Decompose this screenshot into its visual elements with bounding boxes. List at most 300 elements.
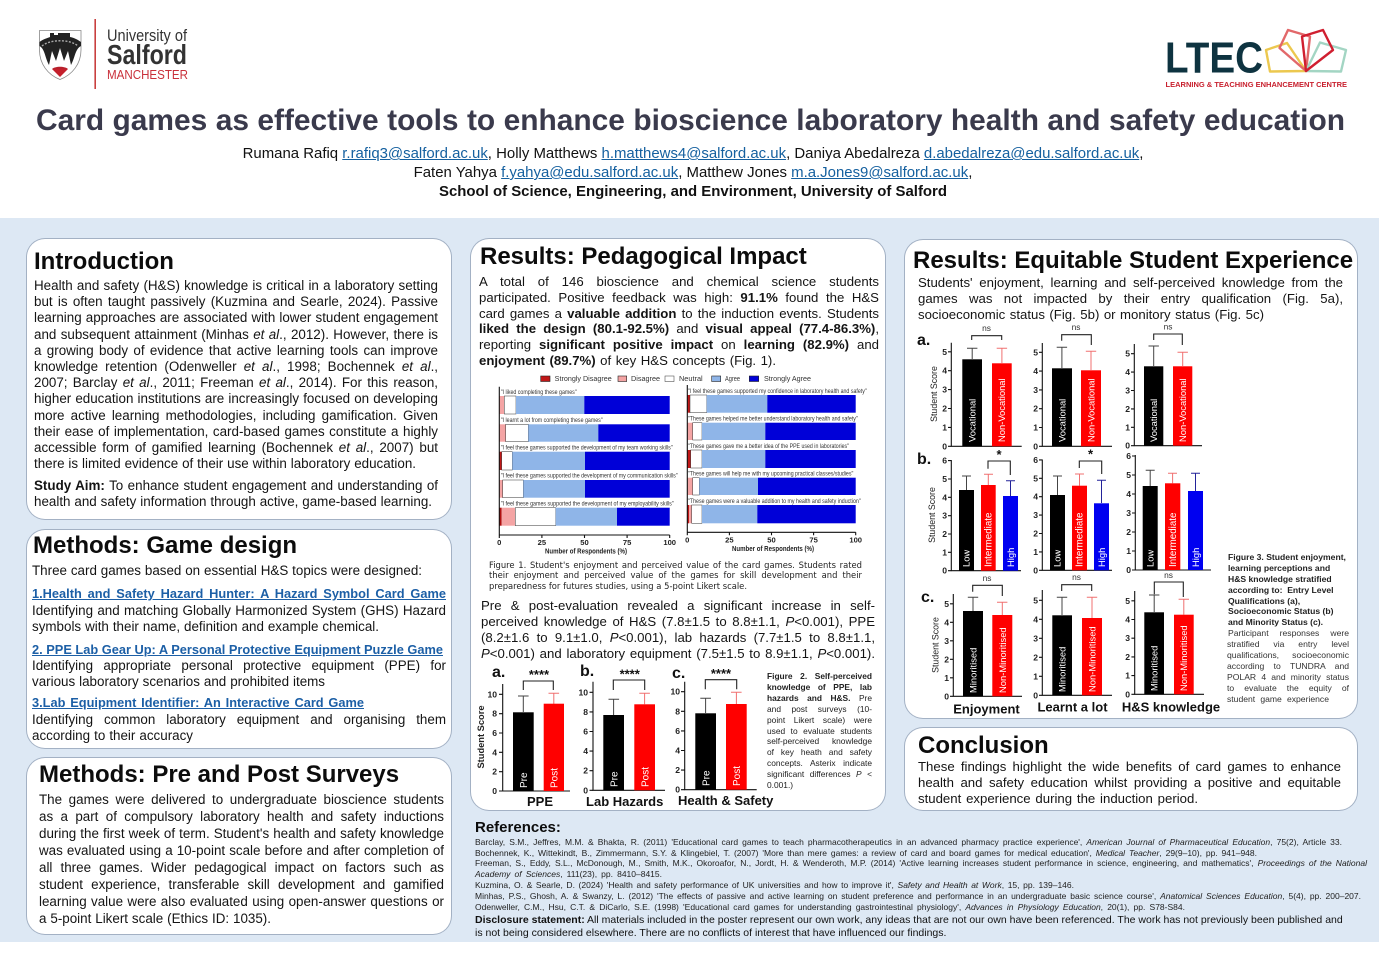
chart a PPE: 10: [487, 689, 497, 699]
chart a PPE: Pre: [519, 772, 530, 788]
right Likert chart: 25: [725, 536, 734, 544]
chart b3: 2: [1126, 527, 1131, 537]
chart c2: Minoritised: [1056, 647, 1068, 692]
chart a3: 3: [1125, 386, 1130, 396]
chart c3: Minoritised: [1148, 646, 1160, 691]
chart b Lab Hazards: [578, 663, 665, 809]
chart c3: [1122, 570, 1220, 714]
text: reference list: Odenweller, C.M., Hsu, C.T. & DiCarlo, S.E. (1998) 'Educational card games for understanding gastrointestinal physiology', Advances in Physiology Education, 20(1), pp. S78-S84.: [475, 902, 1185, 912]
chart c3: 0: [1125, 689, 1130, 699]
chart c3: ns: [1164, 570, 1173, 580]
text: equitable experience: [918, 275, 1343, 322]
text: disclosure statement: [475, 914, 1343, 938]
caption: Figure 2: of key heath and safety: [767, 747, 872, 757]
chart b3: 4: [1126, 489, 1131, 499]
chart b Lab Hazards: 0: [583, 785, 588, 795]
caption: Figure 3: [1227, 552, 1350, 704]
text: surveys body: [39, 792, 444, 926]
chart a1: [942, 323, 1022, 451]
caption regular lines: [1227, 628, 1350, 704]
left Likert chart: 100: [663, 538, 676, 547]
text: game 3 description: [32, 712, 446, 743]
caption: Figure 2: hazards and H&S. Pre: [767, 693, 872, 703]
chart a3: 2: [1125, 404, 1130, 414]
chart c2: Non-Minoritised: [1086, 626, 1098, 692]
text: reference list: Freeman, S., Eddy, S.L., McDonough, M., Smith, M.K., Okoroafor, N., Jordt, H. & Wenderoth, M.P. (2014) 'Active learning increases student performance in science, engineering, and mathematics', Proceedings of the National: [475, 858, 1367, 868]
text: introduction body: a growing body of evidence that active learning tools can improve: [34, 343, 438, 358]
chart c Health and Safety: Post: [732, 766, 743, 786]
text: game 3 description: according to their accuracy: [32, 728, 193, 743]
chart a PPE: Post: [550, 768, 560, 788]
panel: Results Equitable Student Experience: [905, 240, 1357, 718]
authors and affiliation: Faten Yahya f.yahya@edu.salford.ac.uk, Matthew Jones m.a.Jones9@salford.ac.uk,: [414, 164, 972, 181]
chart b Lab Hazards: 4: [583, 746, 588, 756]
chart a PPE: Student Score: [476, 705, 486, 769]
row a: entry level qualification: Student Score: [929, 366, 939, 422]
chart b Lab Hazards: b.: [580, 663, 594, 680]
chart b2: High: [1096, 548, 1107, 567]
right Likert chart: Number of Respondents (%): [732, 544, 814, 553]
chart a3: 1: [1125, 422, 1130, 432]
text: pre and post evaluation: Pre & post-evaluation revealed a significant increase in self-: [481, 598, 875, 613]
chart b2: *: [1088, 446, 1094, 462]
authors and affiliation: Rumana Rafiq r.rafiq3@salford.ac.uk, Holly Matthews h.matthews4@salford.ac.uk, Daniya Abedalreza d.abedalreza@edu.salford.ac.uk,: [243, 145, 1143, 162]
row c: minority status: Student Score: [930, 617, 940, 673]
chart b2: Intermediate: [1074, 512, 1086, 567]
caption: Figure 1: [489, 560, 862, 591]
chart b1: 2: [942, 529, 947, 539]
caption: Figure 1: Figure 1. Student's enjoyment and perceived value of the card games. Students rated: [489, 560, 862, 570]
caption regular lines: according to TUNDRA and: [1227, 661, 1349, 671]
chart b Lab Hazards: Pre: [610, 771, 620, 787]
text: reference list: Academy of Sciences, 111(23), pp. 8410–8415.: [475, 869, 662, 879]
chart c Health and Safety: 10: [670, 687, 680, 697]
chart a1: 1: [942, 422, 947, 432]
row b: socioeconomic status: b.: [917, 451, 931, 468]
text: pedagogical results: participated. Positive feedback was high: 91.1% found the H&S: [479, 290, 879, 305]
chart c Health and Safety: 0: [675, 785, 680, 795]
legend: Agree: [725, 376, 740, 383]
heading: Results Equitable Student Experience: Results: Equitable Student Experience: [913, 247, 1353, 274]
chart b1: 3: [942, 511, 947, 521]
text: reference list: Minhas, P.S., Ghosh, A. & Swanzy, L. (2012) 'The effects of passive and active learning on student preference and performance in an undergraduate basic science course', Anatomical Sciences Education, 5(4), pp. 200–207.: [475, 891, 1361, 901]
chart a1: Vocational: [966, 399, 978, 442]
left Likert chart: Number of Respondents (%): [545, 546, 627, 556]
chart c1: 5: [944, 599, 949, 609]
chart c1: Non-Minoritised: [997, 627, 1008, 693]
chart b Lab Hazards: 6: [583, 726, 588, 736]
chart c2: [1033, 572, 1112, 714]
caption: Figure 2: Figure 2. Self-perceived: [767, 671, 872, 681]
left Likert chart: 50: [580, 538, 589, 547]
chart b1: 4: [942, 492, 947, 502]
legend: Neutral: [679, 376, 703, 383]
link heading: game 2: 2. PPE Lab Gear Up: A Personal Protective Equipment Puzzle Game: [32, 642, 443, 657]
row a: entry level qualification: a.: [917, 332, 930, 349]
text: introduction body: 2007; Barclay et al., 2011; Freeman et al., 2014). For this reason,: [34, 375, 438, 390]
logo: University of Salford: University of: [107, 27, 187, 45]
chart a1: 4: [942, 366, 947, 376]
chart b3: High: [1190, 548, 1201, 567]
text: disclosure statement: Disclosure statement: All materials included in the poster represent our own work, any ideas that are not our own have been referenced. The work has not previously been published and: [475, 914, 1343, 926]
chart b Lab Hazards: 10: [578, 687, 588, 697]
chart b3: 3: [1126, 508, 1131, 518]
chart a PPE: a.: [492, 664, 505, 681]
link heading: game 1: 1.Health and Safety Hazard Hunter: A Hazard Symbol Card Game: [32, 586, 446, 601]
logo: LTEC: LEARNING & TEACHING ENHANCEMENT CENTRE: [1166, 82, 1347, 89]
caption regular lines: POLAR 4 and minority status: [1227, 672, 1349, 682]
chart a3: 5: [1125, 349, 1130, 359]
chart a PPE: 4: [492, 747, 497, 757]
chart b2: 3: [1033, 510, 1038, 520]
text: surveys body: all three games. Wider pedagogical impact on factors such as: [39, 860, 444, 875]
chart a PPE: 0: [492, 786, 497, 796]
text: introduction body: accessible form of gamified learning (Bochennek et al., 2007) but: [34, 440, 438, 455]
chart c Health and Safety: [670, 665, 774, 808]
chart b3: [1126, 451, 1211, 575]
panel: Results Pedagogical Impact: [471, 239, 885, 810]
right Likert chart: "These games gave me a better idea of the PPE used in laboratories": [688, 444, 849, 450]
text: introduction body: there is limited evidence of their use within laboratory education.: [34, 456, 416, 471]
chart a1: 3: [942, 385, 947, 395]
chart c2: 2: [1033, 652, 1038, 662]
chart c2: 1: [1033, 671, 1038, 681]
chart b3: 0: [1126, 565, 1131, 575]
caption: Figure 2: concepts. Asterix indicate: [767, 758, 872, 768]
chart b Lab Hazards: 2: [583, 766, 588, 776]
caption bold lines: Qualifications (a),: [1228, 596, 1300, 606]
chart b3: 5: [1126, 470, 1131, 480]
chart a3: 4: [1125, 367, 1130, 377]
text: study aim: health and safety information through active, game-based learning.: [34, 494, 432, 509]
chart b2: 5: [1033, 473, 1038, 483]
text: conclusion body: student experience during the induction period.: [918, 791, 1198, 806]
caption: Figure 2: point Likert scale) were: [767, 715, 872, 725]
chart b3: 1: [1126, 546, 1131, 556]
caption bold lines: according to: Entry Level: [1228, 585, 1334, 595]
right Likert chart: "These games helped me better understand laboratory health and safety": [688, 416, 858, 422]
caption bold lines: Figure 3. Student enjoyment,: [1228, 552, 1346, 562]
chart a1: 0: [942, 441, 947, 451]
text: study aim: Study Aim: To enhance student engagement and understanding of: [34, 478, 438, 493]
text: surveys body: was evaluated using a 10-point scale before and after completion of: [39, 843, 444, 858]
panel: Introduction: [27, 239, 451, 519]
authors and affiliation: [243, 145, 1143, 200]
chart b Lab Hazards: ****: [620, 666, 641, 682]
chart a2: 1: [1033, 422, 1038, 432]
chart c2: 5: [1033, 595, 1038, 605]
chart a PPE: PPE: [527, 794, 553, 809]
chart c3: 3: [1125, 633, 1130, 643]
chart a PPE: [476, 664, 570, 809]
heading: References: References:: [475, 819, 561, 836]
chart a1: 5: [942, 347, 947, 357]
text: introduction body: [34, 278, 438, 471]
text: equitable experience: games was not impacted by their entry qualification (Fig. 5a),: [918, 291, 1343, 306]
chart c Health and Safety: 4: [675, 746, 680, 756]
text: conclusion body: health and safety education whilst providing a positive and equitable: [918, 775, 1341, 790]
caption bold lines: learning perceptions and: [1228, 563, 1330, 573]
chart a PPE: ****: [529, 667, 550, 682]
chart a3: Vocational: [1148, 399, 1159, 442]
text: pre and post evaluation: perceived knowledge of H&S (7.8±1.5 to 8.8±1.1, P<0.001), PPE: [481, 614, 875, 629]
chart a3: ns: [1164, 322, 1172, 332]
caption: Figure 2: [767, 671, 872, 790]
text: introduction body: more active learning methodologies, including gamification. Given: [34, 408, 438, 423]
text: surveys body: learning value were also evaluated using open-answer questions or: [39, 894, 444, 909]
text: game 2 description: various laboratory scenarios and prohibited items: [32, 674, 325, 689]
text: reference list: Kuzmina, O. & Searle, D. (2024) 'Health and safety performance of UK universities and how to improve it', Safety and Health at Work, 15, pp. 139–146.: [475, 880, 1074, 890]
text: pre and post evaluation: P<0.001) and laboratory equipment (7.5±1.5 to 8.9±1.1, P<0.001).: [481, 646, 875, 661]
panel: Conclusion: [905, 728, 1357, 810]
text: surveys body: The games were delivered to undergraduate bioscience students: [39, 792, 444, 807]
caption: Figure 2: self-perceived knowledge: [767, 736, 872, 746]
chart c3: Non-Minoritised: [1178, 625, 1189, 691]
chart: Figure 2 pre and post scores: [476, 663, 774, 809]
legend: Disagree: [631, 376, 660, 383]
chart a PPE: 8: [492, 709, 497, 719]
authors and affiliation: School of Science, Engineering, and Environment, University of Salford: [439, 183, 947, 200]
text: pedagogical results: enjoyment (89.7%) of key H&S concepts (Fig. 1).: [479, 353, 776, 368]
right Likert chart: 75: [809, 536, 819, 544]
caption: Figure 2: and post surveys (10-: [767, 704, 872, 714]
row a: entry level qualification: [917, 322, 1202, 451]
chart a1: Non-Vocational: [996, 378, 1007, 442]
chart a2: Vocational: [1056, 399, 1068, 442]
chart c2: Learnt a lot: [1037, 700, 1108, 714]
logo: LTEC: LTEC: [1165, 34, 1263, 82]
right Likert chart: "These games will help me with my upcoming practical classes/studies": [688, 472, 853, 478]
chart a1: 2: [942, 404, 947, 414]
chart a2: 0: [1033, 441, 1038, 451]
row c: minority status: [921, 570, 1220, 716]
logo: LTEC: [1165, 28, 1348, 89]
left Likert chart: "I learnt a lot from completing these games": [501, 418, 603, 424]
row c: minority status: c.: [921, 589, 934, 606]
text: conclusion body: These findings highlight the wide benefits of card games to enhance: [918, 759, 1341, 774]
right Likert chart: 100: [849, 536, 862, 544]
caption bold lines: H&S knowledge stratified: [1228, 574, 1332, 584]
heading: Introduction: Introduction: [34, 248, 174, 275]
logo: University of Salford: Salford: [107, 39, 187, 70]
text: pedagogical results: [479, 274, 879, 368]
chart b2: 4: [1033, 492, 1038, 502]
background band: [0, 218, 1379, 942]
chart a3: [1125, 322, 1202, 451]
chart b Lab Hazards: Lab Hazards: [586, 794, 663, 809]
legend: Strongly Disagree: [555, 376, 612, 383]
text: introduction body: higher education institutions are increasingly focused on developing: [34, 391, 438, 406]
text: pedagogical results: reporting significant positive impact on learning (82.9%) and: [479, 337, 879, 352]
chart c3: 1: [1125, 671, 1130, 681]
left Likert chart: "I liked completing these games": [501, 390, 577, 396]
chart b2: [1033, 446, 1112, 575]
chart b Lab Hazards: 8: [583, 707, 588, 717]
chart c2: 4: [1033, 614, 1038, 624]
text: game design intro: Three card games based on essential H&S topics were designed:: [32, 563, 422, 578]
chart c2: 3: [1033, 633, 1038, 643]
chart c1: 4: [944, 617, 949, 627]
chart c Health and Safety: ****: [711, 666, 732, 681]
text: conclusion body: [918, 759, 1341, 806]
chart c3: H&S knowledge: [1122, 700, 1220, 714]
chart c2: ns: [1072, 572, 1081, 582]
chart b Lab Hazards: Post: [640, 767, 652, 787]
text: pre and post evaluation: (8.2±1.6 to 9.1±1.0, P<0.001), lab hazards (7.7±1.5 to 8.8±1.1,: [481, 630, 875, 645]
text: reference list: Bochennek, K., Wittekindt, B., Zimmermann, S.Y. & Klingebiel, T. (2007) 'More than mere games: a review of card and board games for medical education', Medical Teacher, 29(9–10), pp. 941–948.: [475, 848, 1257, 858]
left Likert chart: 25: [538, 538, 547, 547]
chart a PPE: 2: [492, 767, 497, 777]
left Likert chart: "I feel these games supported the development of my communication skills": [501, 474, 678, 480]
text: pre and post evaluation: [481, 598, 875, 661]
chart a2: 3: [1033, 385, 1038, 395]
chart c1: Enjoyment: [953, 702, 1020, 716]
chart b1: [942, 447, 1021, 576]
chart c Health and Safety: Pre: [702, 770, 712, 786]
chart c1: 0: [944, 691, 949, 701]
text: game 1 description: [32, 603, 446, 634]
panel: Methods game design: [27, 530, 451, 748]
link heading: game 3: 3.Lab Equipment Identifier: An Interactive Card Game: [32, 695, 364, 710]
right Likert chart: "These games were a valuable addition to my health and safety induction": [688, 499, 861, 505]
panel: Methods pre and post surveys: [27, 758, 451, 934]
caption bold lines: [1228, 552, 1346, 627]
text: study aim: [34, 478, 438, 509]
chart c Health and Safety: 2: [675, 765, 680, 775]
chart b2: Low: [1052, 550, 1062, 567]
text: reference list: [474, 837, 1368, 912]
caption: Figure 2: knowledge of PPE, lab: [767, 682, 872, 692]
text: surveys body: a 5-point Likert scale (Ethics ID: 1035).: [39, 911, 271, 926]
left Likert chart: [497, 387, 678, 556]
chart c1: 3: [944, 636, 949, 646]
chart a2: 2: [1033, 404, 1038, 414]
caption bold lines: Socioeconomic Status (b): [1228, 606, 1334, 616]
legend: [541, 376, 811, 383]
right Likert chart: 0: [685, 536, 689, 544]
legend: Strongly Agree: [764, 376, 811, 383]
text: introduction body: but is often taught passively (Kuzmina and Searle, 2024). Passive: [34, 294, 438, 309]
text: game 2 description: Identifying appropriate personal protective equipment (PPE) for: [32, 658, 446, 673]
chart c Health and Safety: 8: [675, 706, 680, 716]
right Likert chart: "I feel these games supported my confidence in laboratory health and safety": [688, 389, 867, 395]
logo: University of Salford: [39, 19, 188, 89]
chart c Health and Safety: 6: [675, 726, 680, 736]
text: introduction body: knowledge retention (Odenweller et al., 1998; Bochennek et al.,: [34, 359, 438, 374]
chart c Health and Safety: c.: [672, 665, 685, 682]
left Likert chart: "I feel these games supported the development of my team working skills": [501, 446, 673, 452]
chart c1: ns: [983, 573, 991, 583]
title: Card games as effective tools to enhance bioscience laboratory health and safety education: [36, 104, 1345, 137]
caption regular lines: to evaluate the equity of: [1227, 683, 1349, 693]
chart a3: Non-Vocational: [1177, 378, 1188, 442]
text: surveys body: during the first week of term. Student's health and safety knowledge: [39, 826, 444, 841]
chart c3: 4: [1125, 614, 1130, 624]
chart b1: 6: [942, 456, 947, 466]
text: reference list: Barclay, S.M., Jeffres, M.M. & Bhakta, R. (2011) 'Educational card games to teach pharmacotherapeutics in an advanced pharmacy practice experience', American Journal of Pharmaceutical Education, 75(2), Article 33.: [475, 837, 1342, 847]
text: game 1 description: Identifying and matching Globally Harmonized System (GHS) Hazard: [32, 603, 446, 618]
chart: Figure 1 stacked Likert bars: [497, 376, 867, 556]
text: introduction body: learning approaches are associated with lower student engagement: [34, 310, 438, 325]
caption bold lines: and Minority Status (c).: [1228, 617, 1323, 627]
chart c3: 5: [1125, 596, 1130, 606]
caption regular lines: qualifications, socioeconomic: [1227, 650, 1349, 660]
chart c1: 2: [944, 654, 949, 664]
text: equitable experience: socioeconomic status (Fig. 5b) or monitory status (Fig. 5c): [918, 307, 1264, 322]
text: introduction body: and subsequent attainment (Minhas et al., 2012). However, there is: [34, 326, 438, 342]
text: introduction body: their ease of implementation, card-based games constitute a highly: [34, 424, 438, 439]
left Likert chart: 75: [623, 538, 632, 547]
caption: Figure 2: significant differences P <: [767, 769, 872, 779]
chart a2: ns: [1072, 322, 1080, 332]
text: pedagogical results: liked the design (80.1-92.5%) and visual appeal (77.4-86.3%),: [479, 321, 879, 336]
chart b3: Low: [1144, 550, 1156, 567]
chart b2: 2: [1033, 528, 1038, 538]
chart b1: Low: [960, 550, 972, 567]
heading: Methods Game design: Methods: Game design: [33, 532, 297, 559]
chart c2: 0: [1033, 690, 1038, 700]
chart a2: 4: [1033, 366, 1038, 376]
heading: Results Pedagogical Impact: Results: Pedagogical Impact: [480, 243, 807, 270]
chart b2: 6: [1033, 455, 1038, 465]
chart b1: Intermediate: [984, 512, 994, 567]
text: disclosure statement: is not being considered elsewhere. There are no conflicts of interest that have influenced our findings.: [475, 926, 946, 938]
chart c1: [944, 573, 1022, 716]
chart a PPE: 6: [492, 728, 497, 738]
text: game 2 description: [32, 658, 446, 689]
text: surveys body: student experience, transferable skill development and gamified: [39, 877, 444, 892]
row b: socioeconomic status: [917, 446, 1211, 576]
caption: Figure 2: 0.001.): [767, 780, 793, 790]
chart b3: Intermediate: [1168, 512, 1179, 567]
caption: Figure 1: preparedness for futures studies, using a 5-point Likert scale.: [489, 581, 747, 591]
text: equitable experience: Students' enjoyment, learning and self-perceived knowledge from the: [918, 275, 1343, 290]
chart a2: 5: [1033, 347, 1038, 357]
chart: Figure 3 stratified bars: [917, 322, 1220, 716]
chart b2: 1: [1033, 547, 1038, 557]
row b: socioeconomic status: Student Score: [927, 487, 937, 543]
chart a2: [1033, 322, 1112, 451]
chart c3: 2: [1125, 652, 1130, 662]
caption regular lines: student game experience: [1227, 694, 1329, 704]
chart c1: 1: [944, 673, 949, 683]
caption regular lines: stratified via entry level: [1227, 639, 1349, 649]
left Likert chart: "I feel these games supported the development of my employability skills": [501, 502, 674, 508]
right Likert chart: 50: [767, 536, 776, 544]
chart c Health and Safety: Health & Safety: [678, 793, 774, 808]
chart b1: 0: [942, 566, 947, 576]
chart b1: High: [1005, 548, 1016, 567]
text: pedagogical results: card games a valuable addition to the induction events. Students: [479, 306, 879, 321]
chart a1: ns: [982, 323, 991, 333]
text: game 3 description: Identifying common laboratory equipment and organising them: [32, 712, 446, 727]
chart b1: 1: [942, 547, 947, 557]
left Likert chart: 0: [497, 538, 501, 547]
chart c1: Minoritised: [968, 648, 978, 693]
caption: Figure 1: their enjoyment and perceived value of the games for skill development and their: [489, 570, 862, 580]
text: surveys body: as a part of compulsory laboratory health and safety inductions: [39, 809, 444, 824]
logo: University of Salford: MANCHESTER: [107, 67, 188, 82]
references: [474, 819, 1368, 938]
chart b2: 0: [1033, 565, 1038, 575]
heading: Conclusion: Conclusion: [918, 732, 1049, 759]
text: game 1 description: symbols with their name, definition and example chemical.: [32, 619, 379, 634]
caption: Figure 2: used to evaluate students: [767, 726, 872, 736]
chart a3: 0: [1125, 441, 1130, 451]
text: introduction body: Health and safety (H&S) knowledge is critical in a laboratory setting: [34, 278, 438, 293]
chart b1: 5: [942, 474, 947, 484]
right Likert chart: [685, 385, 867, 553]
